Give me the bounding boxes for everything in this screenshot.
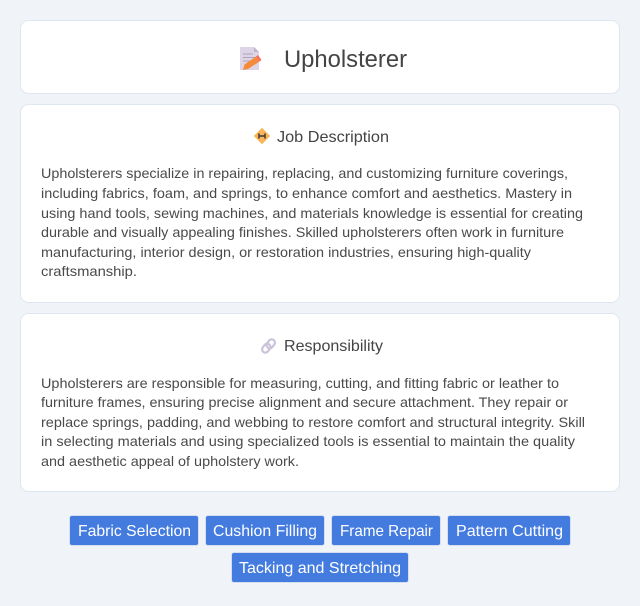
text block: responsibility: in selecting materials and using specialized tools is essential to maintain the quality [41, 433, 575, 449]
tag: frame repair: Frame Repair [340, 523, 434, 540]
text block: job description [41, 165, 583, 279]
tag: cushion filling [206, 516, 324, 546]
text block: responsibility: and aesthetic appeal of upholstery work. [41, 453, 299, 469]
tag: tacking and stretching [232, 552, 408, 582]
skill tags [70, 516, 570, 582]
tag: tacking and stretching: Tacking and Stretching [239, 560, 401, 577]
tag: pattern cutting [448, 516, 570, 546]
panel: header [20, 20, 620, 94]
text block: responsibility [41, 375, 585, 469]
text block: job description: durable and visually appealing finishes. Skilled upholsterers often work in furniture [41, 224, 564, 240]
text block: responsibility: furniture frames, ensuring precise alignment and secure attachment. They repair or [41, 394, 568, 410]
text block: job description: including fabrics, foam, and springs, to enhance comfort and aesthetics. Mastery in [41, 185, 572, 201]
icon: orange diamond [254, 128, 270, 144]
title: Upholsterer [284, 46, 407, 73]
tag: fabric selection: Fabric Selection [78, 523, 191, 540]
tag: cushion filling: Cushion Filling [213, 523, 317, 540]
tag: frame repair [332, 516, 440, 546]
icon: document with pencil [240, 47, 262, 70]
text block: job description: manufacturing, interior design, or restoration industries, ensuring high-quality [41, 244, 531, 260]
text block: responsibility: replace springs, padding, and webbing to restore comfort and structural integrity. Skill [41, 414, 585, 430]
text block: job description: Upholsterers specialize in repairing, replacing, and customizing furniture coverings, [41, 165, 568, 181]
text block: job description: using hand tools, sewing machines, and materials knowledge is essential for creating [41, 205, 583, 221]
icon: chain link [261, 338, 276, 354]
tag: pattern cutting: Pattern Cutting [456, 523, 563, 540]
heading: job description: Job Description [277, 129, 389, 146]
heading: responsibility: Responsibility [284, 338, 383, 355]
text block: responsibility: Upholsterers are responsible for measuring, cutting, and fitting fabric or leather to [41, 375, 559, 391]
tag: fabric selection [70, 516, 198, 546]
text block: job description: craftsmanship. [41, 263, 137, 279]
panel: responsibility [20, 314, 620, 492]
panel: job description [20, 104, 620, 302]
